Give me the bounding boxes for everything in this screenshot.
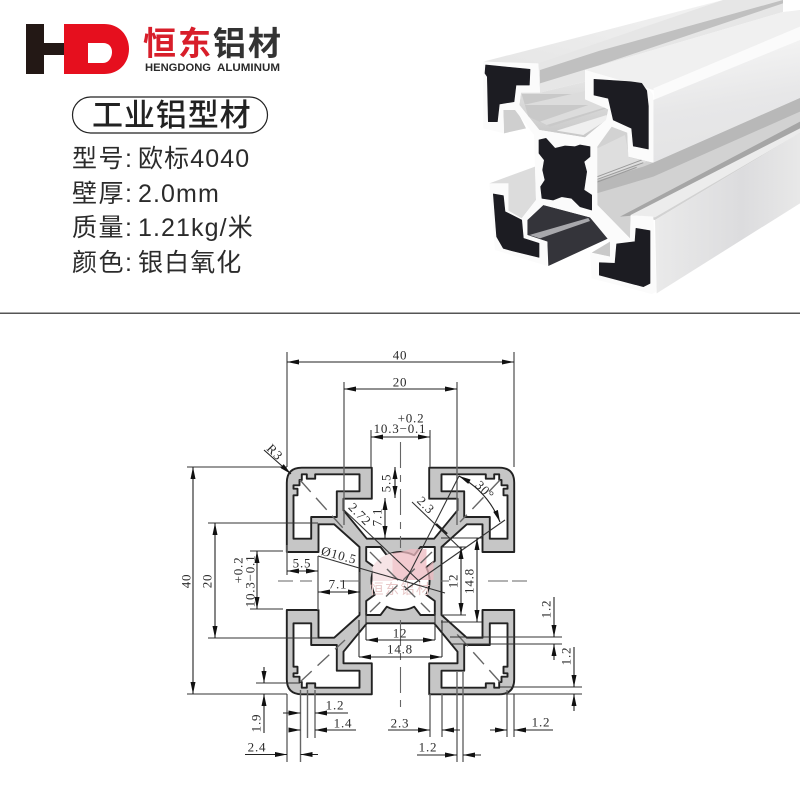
right channel shadow stripe [597, 98, 800, 193]
dimension: top 5.5 [378, 467, 395, 498]
centre lines [278, 442, 527, 708]
spec: wall thickness: 壁厚: [72, 180, 133, 208]
dimension: height 20 [200, 523, 215, 638]
dimension: slot width top: 10.3−0.1 [374, 421, 426, 436]
dimension: right 14.8 [462, 538, 477, 622]
upper slot interior [519, 82, 608, 137]
spec: weight [72, 214, 254, 242]
dimension: slot width top: +0.2 [398, 410, 424, 426]
dimension: slot width left: +0.2 [230, 557, 246, 583]
dimension: slot width left: 10.3−0.1 [242, 555, 258, 607]
spec: colour [72, 249, 242, 277]
logo wordmark: 铝材 [213, 25, 283, 62]
dimension: width 40: 40 [393, 348, 407, 362]
dimension: R3: R3 [264, 441, 286, 463]
upper channel wall [538, 0, 783, 93]
top face of upper left block [483, 0, 773, 64]
extension lines [187, 352, 582, 762]
dimension: 1.4 [298, 716, 356, 730]
dimension: 30 degrees [405, 476, 505, 590]
dimension: diameter 10.5: Ø10.5 [320, 543, 358, 567]
quadrant upper right [400, 468, 514, 581]
lower block top face [631, 128, 800, 217]
title pill: 工业铝型材 [92, 98, 252, 133]
bottom channel highlight [529, 218, 590, 238]
dimension: bottom 1.2 centre [417, 740, 481, 755]
spec: weight: 1.21kg/米 [138, 214, 254, 242]
spec: model: 欧标4040 [138, 145, 250, 173]
spec: wall thickness: 2.0mm [138, 180, 220, 208]
right block top face [585, 10, 800, 90]
dimension: bottom 1.2 left: 1.2 [326, 698, 344, 712]
dimension: bottom 12: 12 [393, 626, 407, 640]
dimension: 1.9: 1.9 [248, 714, 264, 732]
spec: model [72, 145, 250, 173]
logo [26, 24, 283, 74]
spec: model: 型号: [72, 145, 133, 173]
black cavity lower left [493, 194, 539, 257]
logo wordmark: ALUMINUM [217, 62, 280, 74]
quadrant upper left [287, 468, 400, 581]
logo wordmark: 恒东 [143, 25, 213, 62]
dimension: left 5.5: 5.5 [293, 556, 311, 570]
lower right gray gap [592, 242, 610, 257]
spec: colour: 颜色: [72, 249, 133, 277]
upper slot floor [522, 94, 607, 127]
dimension: 2.72: 2.72 [346, 500, 374, 528]
right block highlight [653, 27, 800, 103]
dimension: bottom 1.2 centre: 1.2 [419, 740, 437, 754]
dimension: 2.3: 2.3 [414, 493, 438, 517]
right channel base [597, 98, 800, 238]
dimension: height 20: 20 [200, 574, 214, 588]
black central hole [539, 138, 592, 210]
divider line [0, 312, 800, 314]
lower left channel [489, 167, 536, 218]
cross-section drawing [178, 348, 582, 762]
logo wordmark: HENGDONG [145, 62, 211, 74]
dimension: right 14.8: 14.8 [462, 568, 476, 594]
dimension: bottom 14.8 [359, 642, 442, 657]
right block side face [653, 40, 800, 163]
dimension: slot width top [371, 410, 430, 437]
dimension: bottom 2.3 [388, 716, 460, 730]
dimension: 2.4 [245, 740, 318, 754]
black cavity upper right [594, 79, 648, 149]
dimension: width 20: 20 [393, 374, 407, 390]
upper slot light stripe [523, 91, 605, 125]
upper slot bright floor [557, 115, 607, 135]
profile cross-section [287, 468, 514, 694]
dimension: slot width left [230, 551, 258, 609]
core side light panel [597, 135, 647, 179]
dimension: left 7.1: 7.1 [329, 576, 347, 592]
dimension: 1.9 [248, 667, 264, 733]
dimension: right 1.2 lower [558, 647, 574, 711]
dimension: bottom 1.2 left [283, 698, 348, 713]
upper channel dark stripe [540, 0, 783, 83]
watermark in cavity [370, 549, 434, 597]
dimension: right 1.2 upper: 1.2 [538, 600, 554, 618]
watermark in cavity: 恒东铝材 [370, 581, 432, 597]
spec list [72, 145, 254, 277]
dimension: 1.4: 1.4 [334, 716, 352, 730]
spec: wall thickness [72, 180, 220, 208]
dimension: bottom 1.2 right [490, 714, 553, 730]
black cavity lower right [599, 228, 650, 287]
dimension: right 1.2 lower: 1.2 [558, 647, 574, 665]
dimension: left 7.1 [318, 576, 360, 592]
spec: colour: 银白氧化 [138, 249, 242, 277]
core underlay [360, 539, 442, 623]
dimension: right 12: 12 [446, 574, 460, 588]
dimension: diameter 10.5 [318, 543, 445, 593]
black cavity upper left [485, 65, 530, 122]
logo mark: HD [26, 24, 129, 74]
spec: weight: 质量: [72, 214, 133, 242]
dimension: height 40: 40 [178, 574, 194, 588]
dimension: width 20 [344, 374, 457, 390]
dimension: bottom 12 [366, 626, 435, 640]
dimension: left 5.5 [287, 556, 318, 571]
dimension: top 7.1: 7.1 [370, 508, 384, 526]
dimension: 2.72 [344, 500, 420, 582]
upper left gap [503, 110, 526, 133]
dimension: bottom 2.3: 2.3 [391, 716, 409, 730]
dimension: right 1.2 upper [538, 597, 554, 660]
3D aluminium profile render [483, 0, 800, 294]
dimension: 2.4: 2.4 [248, 740, 266, 754]
right channel lower stripe [620, 122, 800, 217]
dimension: bottom 14.8: 14.8 [387, 642, 413, 656]
dimension: right 12 [446, 547, 461, 615]
dimension: 30 degrees: 30° [472, 477, 498, 503]
dimension: top 7.1 [370, 498, 385, 538]
dimension: R3 [264, 441, 291, 474]
quadrant lower left [287, 581, 400, 694]
dark bottom channel [527, 205, 608, 266]
central cavity [366, 547, 435, 615]
dimension: bottom 1.2 right: 1.2 [532, 714, 550, 730]
quadrant lower right [400, 581, 514, 694]
right channel groove lines [597, 160, 643, 182]
logo wordmark [143, 25, 283, 74]
front white face [483, 62, 657, 294]
dimension: top 5.5: 5.5 [378, 474, 394, 492]
lower block side face [655, 133, 800, 293]
dimension: 2.3 [412, 493, 462, 550]
